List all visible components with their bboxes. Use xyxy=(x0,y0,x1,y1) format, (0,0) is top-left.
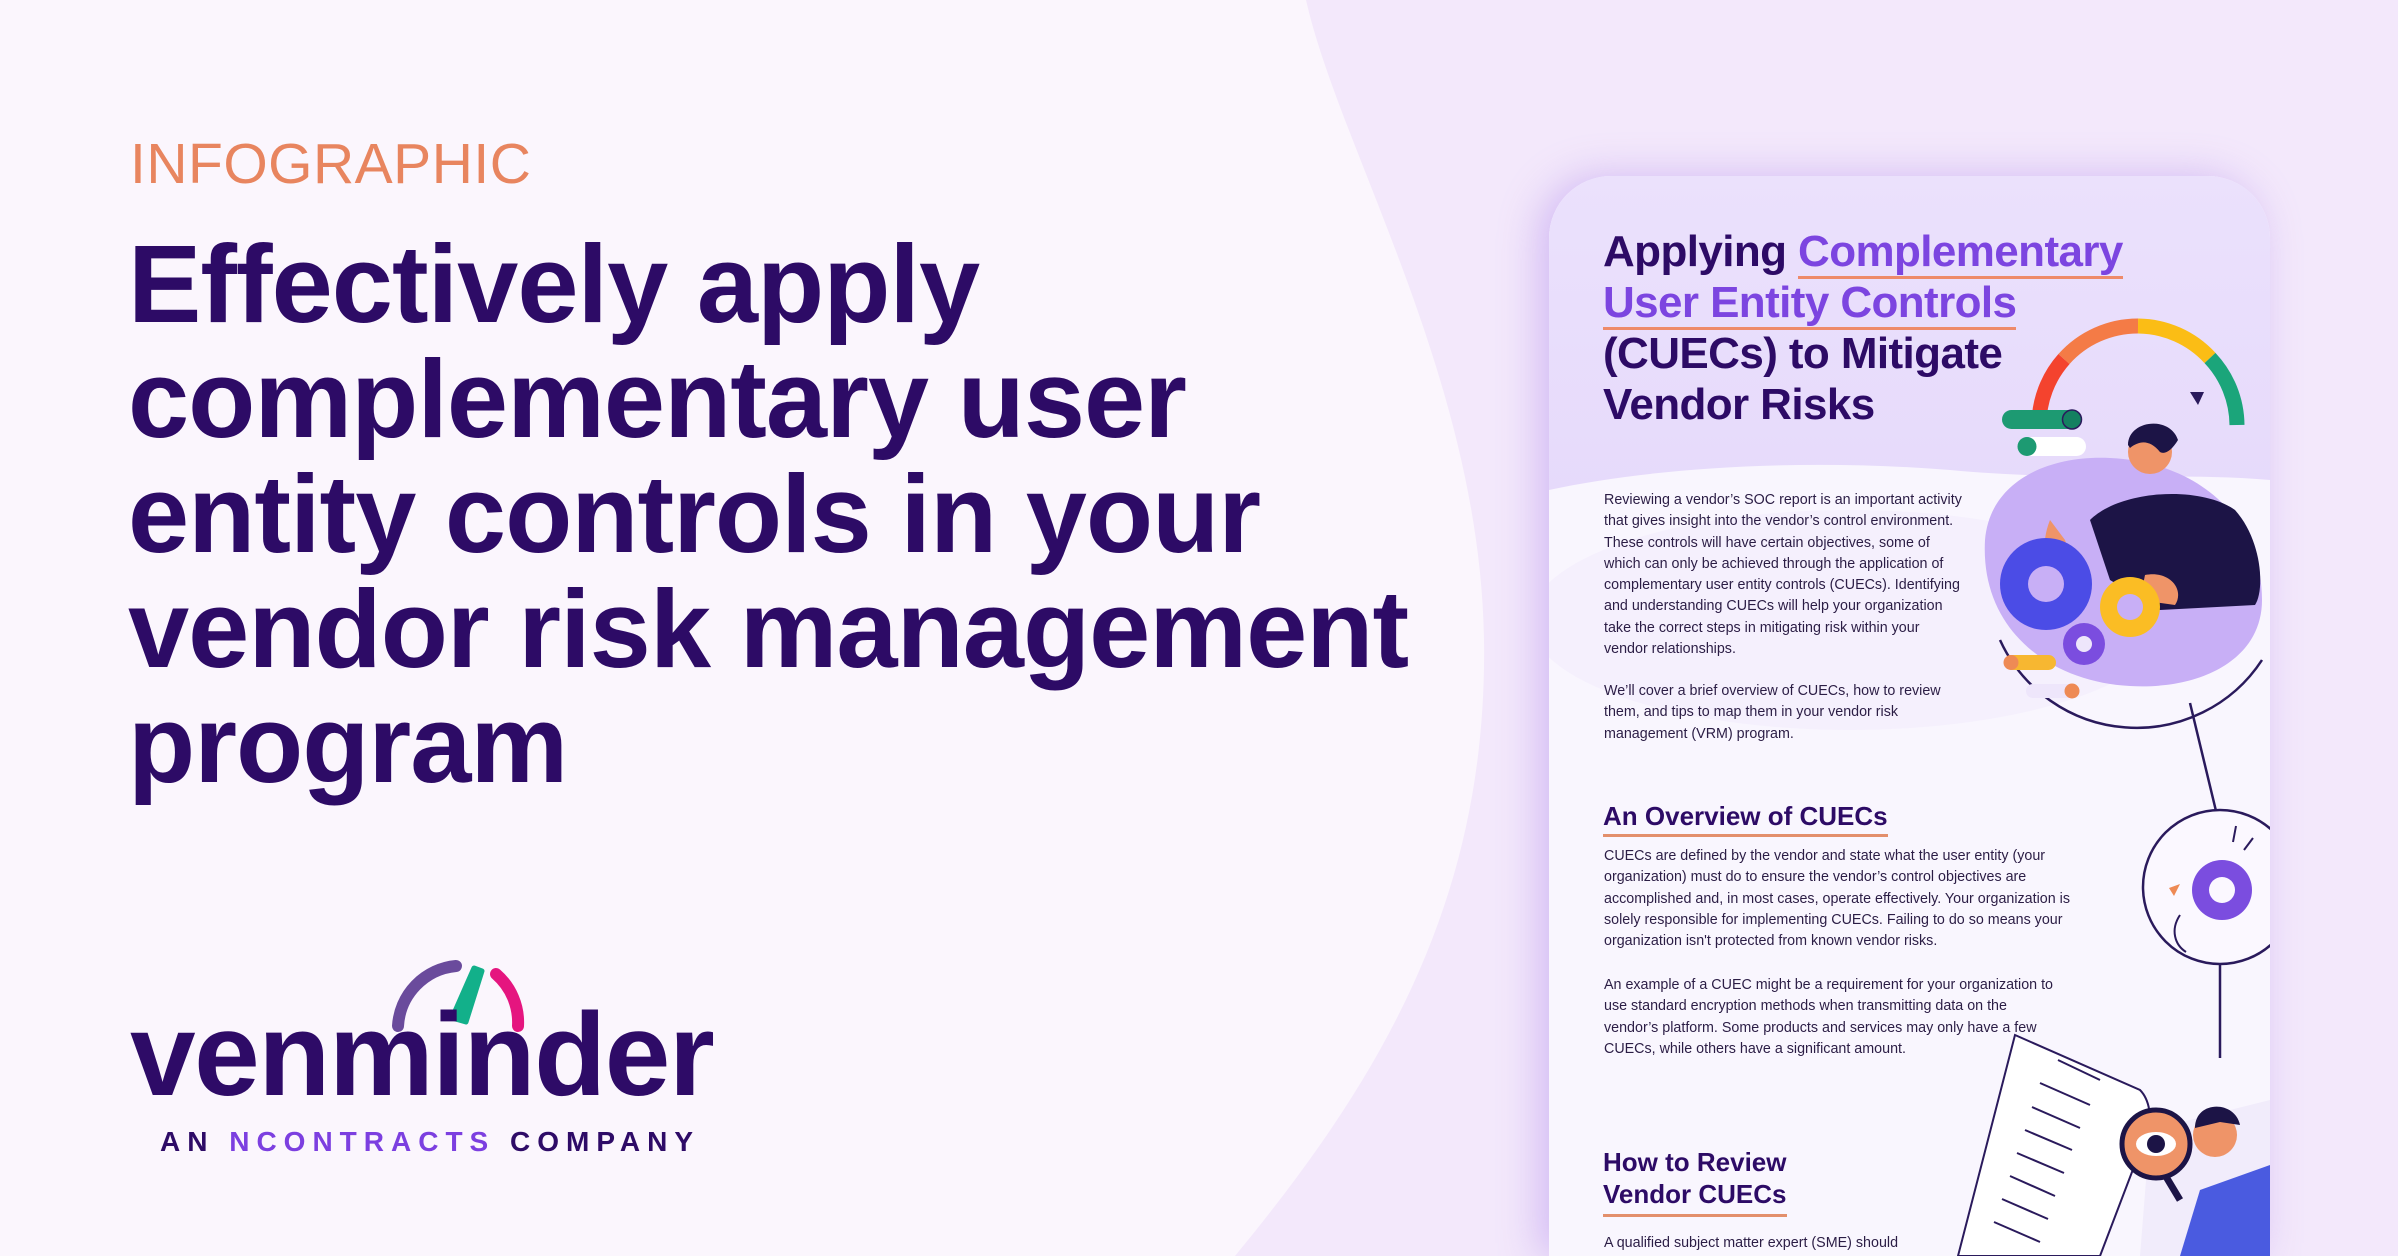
illustration: person with gears xyxy=(2000,424,2260,665)
heading: How to Review Vendor CUECs xyxy=(1603,1146,1786,1217)
connector line xyxy=(2190,703,2220,1058)
icon: circle with gear xyxy=(2143,810,2297,964)
illustration: purple blob xyxy=(1985,458,2262,686)
card intro text: These controls will have certain objectives, some of xyxy=(1604,535,1930,551)
card intro text: which can only be achieved through the application of xyxy=(1604,556,1943,572)
main heading: program xyxy=(128,683,567,806)
card title: Vendor Risks xyxy=(1603,380,1875,429)
heading: How to Review Vendor CUECs: How to Review xyxy=(1603,1147,1786,1177)
card title: Applying Complementary xyxy=(1603,227,2123,276)
main heading: vendor risk management xyxy=(128,568,1408,691)
overview text: accomplished and, in most cases, operate effectively. Your organization is xyxy=(1604,891,2070,907)
overview example text: An example of a CUEC might be a requirement for your organization to xyxy=(1604,977,2053,993)
main heading: entity controls in your xyxy=(128,453,1260,576)
overview text: CUECs are defined by the vendor and state what the user entity (your xyxy=(1604,848,2045,864)
overview example text: vendor’s platform. Some products and services may only have a few xyxy=(1604,1020,2037,1036)
illustration: gauge xyxy=(2039,326,2237,425)
card intro text: Reviewing a vendor’s SOC report is an important activity xyxy=(1604,492,1962,508)
card intro text 2 xyxy=(1604,683,1941,742)
overview text xyxy=(1604,848,2070,949)
tagline: AN NCONTRACTS COMPANY xyxy=(160,1126,700,1157)
icon: gauge xyxy=(392,960,524,1032)
card title xyxy=(1603,227,2124,429)
overview example text: CUECs, while others have a significant amount. xyxy=(1604,1041,1906,1057)
card intro text 2: We’ll cover a brief overview of CUECs, how to review xyxy=(1604,683,1941,699)
card title: (CUECs) to Mitigate xyxy=(1603,329,2002,378)
wordmark: venminder xyxy=(130,989,713,1121)
heading: How to Review Vendor CUECs: Vendor CUECs xyxy=(1603,1179,1786,1209)
card intro text: vendor relationships. xyxy=(1604,641,1736,657)
main heading: complementary user xyxy=(128,338,1186,461)
card title: User Entity Controls xyxy=(1603,278,2016,327)
card intro text: and understanding CUECs will help your organization xyxy=(1604,598,1943,614)
overview text: solely responsible for implementing CUECs. Failing to do so means your xyxy=(1604,912,2062,928)
overview example text: use standard encryption methods when transmitting data on the xyxy=(1604,998,2007,1014)
main heading xyxy=(128,223,1408,806)
illustration: pills xyxy=(2002,410,2086,698)
logo: venminder xyxy=(130,960,713,1157)
label: INFOGRAPHIC: INFOGRAPHIC xyxy=(130,132,531,196)
card intro text: take the correct steps in mitigating risk within your xyxy=(1604,620,1919,636)
card intro text xyxy=(1604,492,1962,657)
illustration: document and magnifier xyxy=(1958,1035,2270,1256)
panel: infographic preview card xyxy=(1549,176,2270,1256)
card intro text 2: them, and tips to map them in your vendor risk xyxy=(1604,704,1898,720)
heading: An Overview of CUECs: An Overview of CUECs xyxy=(1603,801,1888,831)
main heading: Effectively apply xyxy=(128,223,979,346)
card intro text: complementary user entity controls (CUECs). Identifying xyxy=(1604,577,1960,593)
card intro text 2: management (VRM) program. xyxy=(1604,726,1794,742)
overview text: organization isn't protected from known vendor risks. xyxy=(1604,933,1937,949)
overview text: organization) must do to ensure the vendor’s control objectives are xyxy=(1604,869,2026,885)
card intro text: that gives insight into the vendor’s control environment. xyxy=(1604,513,1953,529)
overview example text xyxy=(1604,977,2053,1057)
review text: A qualified subject matter expert (SME) should xyxy=(1604,1235,1898,1251)
